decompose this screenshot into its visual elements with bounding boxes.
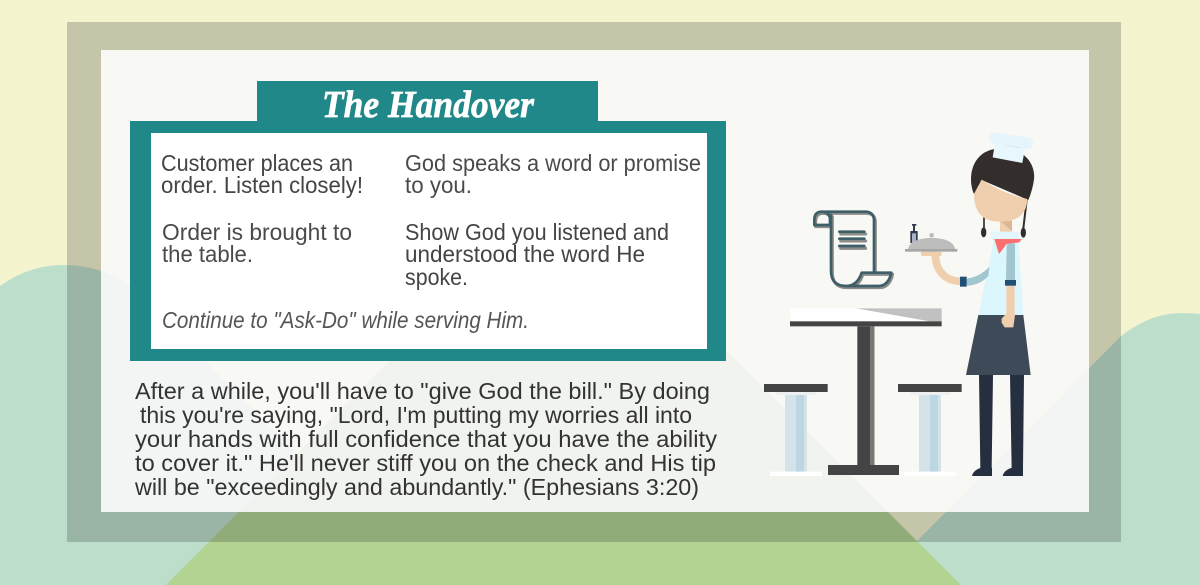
heading tab: The Handover [322, 84, 535, 126]
outer frame [67, 22, 1121, 542]
paragraph: give God the bill: your hands with full confidence that you have the ability [135, 426, 717, 452]
text: God speaks [405, 150, 701, 198]
hand under tray [921, 252, 942, 256]
scarf [994, 239, 1022, 254]
shirt [978, 238, 1023, 315]
paragraph: give God the bill: After a while, you'll have to "give God the bill." By doing [135, 378, 710, 404]
text: show God: Show God you listened and [405, 219, 669, 245]
paragraph: give God the bill: this you're saying, "Lord, I'm putting my worries all into [140, 402, 692, 428]
teal box border [130, 121, 726, 361]
text: show God: spoke. [405, 264, 468, 290]
text: God speaks: God speaks a word or promise [405, 150, 701, 176]
paragraph: give God the bill: to cover it." He'll never stiff you on the check and His tip [135, 450, 716, 476]
paragraph: give God the bill: will be "exceedingly and abundantly." (Ephesians 3:20) [134, 474, 699, 500]
text: God speaks: to you. [405, 172, 472, 198]
left stool [764, 384, 828, 476]
right stool [898, 384, 962, 476]
text: order brought: Order is brought to [162, 219, 352, 245]
face [974, 180, 1027, 222]
left sleeve and arm holding tray [935, 255, 989, 286]
heading tab [257, 81, 598, 126]
text: show God [405, 219, 669, 290]
covered dish [905, 233, 957, 252]
text: customer order: order. Listen closely! [161, 172, 363, 198]
text: customer order: Customer places an [161, 150, 353, 176]
panel: the handover [130, 81, 726, 361]
text: order brought [162, 219, 352, 267]
illustration: waitress and table [764, 138, 1034, 476]
chef hat [993, 138, 1028, 163]
text: customer order [161, 150, 363, 198]
text: continue: Continue to "Ask-Do" while serving Him. [162, 307, 529, 333]
inner panel [101, 50, 1089, 512]
right arm [1002, 243, 1016, 327]
legs and shoes [972, 375, 1024, 476]
icon: receipt scroll [814, 212, 893, 288]
bottle [910, 224, 918, 243]
skirt [966, 315, 1031, 375]
white box [151, 133, 707, 349]
braids [981, 197, 1027, 238]
left cuff [960, 277, 967, 287]
hair back [971, 148, 1034, 200]
table [790, 308, 942, 475]
text: show God: understood the word He [405, 241, 645, 267]
waitress [905, 138, 1034, 476]
text: order brought: the table. [162, 241, 253, 267]
neck [1000, 218, 1012, 233]
collar [991, 232, 1019, 239]
paragraph: give God the bill [134, 378, 717, 500]
